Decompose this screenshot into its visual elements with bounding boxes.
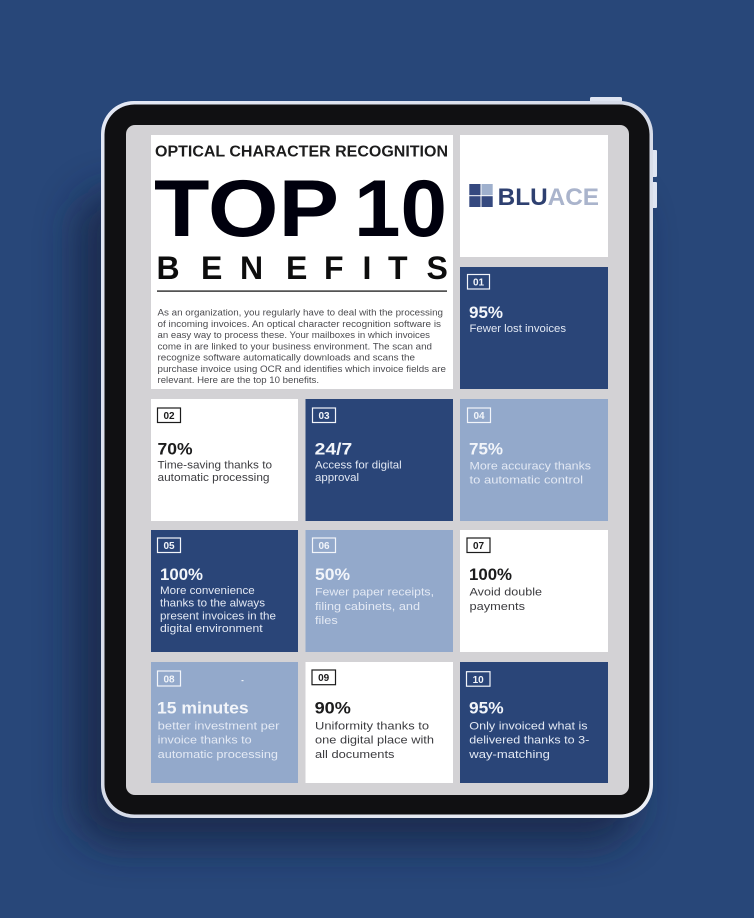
description: digital environment	[160, 623, 264, 635]
stat 95%: 95%	[469, 304, 503, 322]
badge 08: 08	[163, 674, 175, 686]
badge 01	[468, 274, 490, 289]
description	[468, 720, 590, 761]
description: files	[315, 615, 338, 627]
description: Access for digital	[315, 459, 402, 471]
intro paragraph: recognize software automatically downloads and scans the	[158, 352, 415, 364]
icon: logo squares	[469, 184, 493, 207]
description: delivered thanks to 3-	[469, 735, 590, 747]
description	[315, 587, 434, 627]
card 06	[306, 530, 453, 652]
card 03	[306, 399, 453, 521]
description: payments	[470, 601, 525, 613]
logo wordmark: BLUACE	[498, 184, 599, 211]
badge 02	[158, 408, 180, 422]
stat 70%: 70%	[158, 440, 193, 458]
screen	[126, 125, 629, 795]
tablet device	[101, 97, 657, 818]
tablet frame	[101, 101, 653, 818]
card 10	[460, 662, 608, 783]
intro paragraph: relevant. Here are the top 10 benefits.	[158, 375, 319, 386]
card 08	[151, 662, 298, 783]
card 07	[460, 530, 608, 652]
intro paragraph	[158, 308, 446, 386]
badge 10: 10	[473, 675, 484, 686]
description: Only invoiced what is	[469, 720, 588, 732]
panel: header	[151, 135, 453, 389]
badge 06	[312, 538, 336, 552]
description: Time-saving thanks to	[158, 459, 272, 471]
subtitle: benefits: BENEFITS	[156, 250, 448, 286]
badge 09	[312, 670, 336, 685]
badge 10	[466, 672, 490, 686]
description	[158, 720, 280, 761]
description: Uniformity thanks to	[315, 720, 429, 732]
panel: logo	[460, 135, 608, 257]
stat 95%: 95%	[469, 699, 504, 717]
description: filing cabinets, and	[315, 601, 420, 613]
bezel	[104, 104, 650, 814]
description: invoice thanks to	[158, 735, 252, 747]
infographic content	[151, 135, 608, 783]
description: way-matching	[468, 749, 550, 761]
intro paragraph: purchase invoice using OCR and identifies which invoice fields are	[158, 364, 446, 375]
badge 09: 09	[318, 673, 330, 684]
side button lower	[650, 182, 657, 208]
description	[315, 459, 402, 484]
badge 03: 03	[318, 411, 330, 422]
badge 04	[468, 408, 490, 422]
badge 08	[158, 671, 180, 686]
side button upper	[650, 150, 657, 177]
card 02	[151, 399, 298, 521]
heading: optical character recognition: OPTICAL CHARACTER RECOGNITION	[155, 144, 448, 161]
badge 05: 05	[163, 541, 175, 552]
badge 07	[467, 538, 490, 552]
card 09	[306, 662, 453, 783]
tablet shadow	[75, 190, 635, 845]
stat 90%: 90%	[315, 699, 351, 717]
description: automatic processing	[158, 749, 278, 761]
stat 15 minutes: 15 minutes	[157, 699, 249, 717]
badge 07: 07	[473, 541, 484, 552]
description	[158, 459, 272, 484]
description: thanks to the always	[160, 598, 265, 610]
title: top 10: 10	[354, 164, 447, 254]
description: Fewer lost invoices	[470, 323, 566, 335]
badge 06: 06	[318, 541, 330, 552]
description: Fewer paper receipts,	[315, 587, 434, 599]
description	[160, 585, 276, 635]
stat 50%: 50%	[315, 566, 350, 584]
description: one digital place with	[315, 735, 434, 747]
badge 03	[312, 408, 336, 422]
description: automatic processing	[158, 472, 270, 484]
badge 01: 01	[473, 278, 484, 288]
intro paragraph: come in are linked to your business environment. The scan and	[158, 341, 432, 352]
stat 100%: 100%	[160, 566, 203, 584]
description	[470, 587, 542, 613]
badge 04: 04	[473, 411, 485, 422]
title: top 10	[154, 164, 447, 254]
description: More convenience	[160, 585, 255, 597]
description: Avoid double	[470, 587, 542, 599]
intro paragraph: an easy way to process these. Your mailboxes in which invoices	[158, 330, 430, 341]
stray dot	[242, 680, 244, 681]
badge 02: 02	[163, 411, 175, 422]
card 05	[151, 530, 298, 652]
title: top 10: TOP	[154, 164, 339, 254]
description: present invoices in the	[160, 610, 276, 622]
description	[470, 461, 591, 487]
description: More accuracy thanks	[470, 461, 591, 473]
description: to automatic control	[470, 475, 583, 487]
stat 24/7: 24/7	[315, 440, 352, 458]
description: all documents	[315, 749, 395, 761]
top button	[590, 97, 622, 105]
header rule	[157, 290, 447, 292]
stat 100%: 100%	[469, 566, 512, 584]
description: better investment per	[158, 720, 280, 732]
badge 05	[158, 538, 180, 552]
stat 75%: 75%	[469, 440, 503, 458]
intro paragraph: As an organization, you regularly have to deal with the processing	[158, 308, 443, 318]
description	[315, 720, 434, 761]
description: approval	[315, 472, 359, 484]
card 04	[460, 399, 608, 521]
intro paragraph: of incoming invoices. An optical character recognition software is	[158, 319, 441, 330]
card 01	[460, 267, 608, 389]
